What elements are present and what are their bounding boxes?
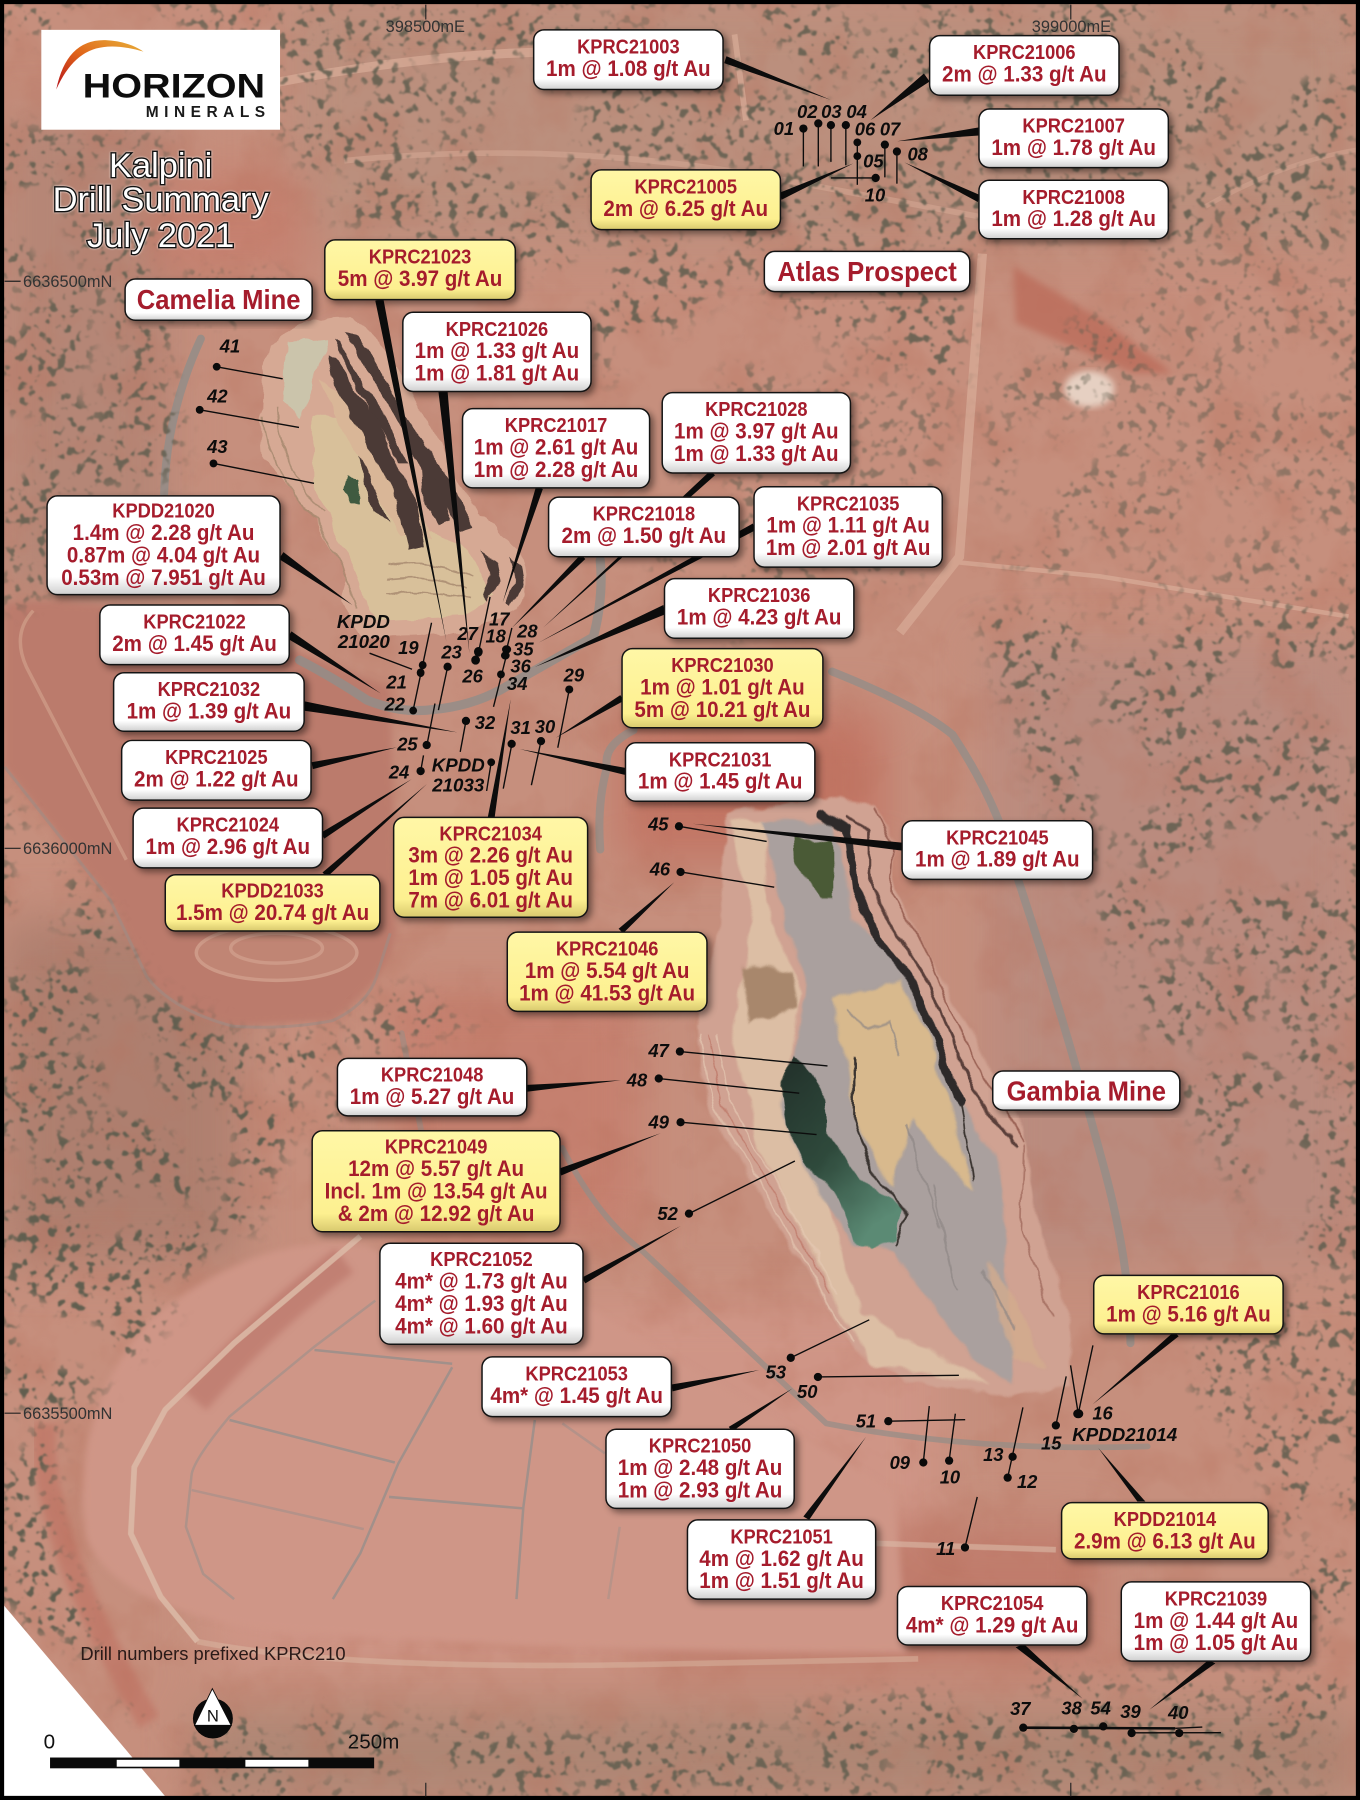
callout KPDD21033 highlighted [165, 875, 380, 931]
callout KPRC21045: 1m @ 1.89 g/t Au [915, 847, 1080, 872]
callout KPRC21028: KPRC21028 [705, 399, 808, 421]
callout KPRC21008 [979, 180, 1168, 239]
white corner [3, 1605, 166, 1798]
drill hole 10 south: 10 [940, 1466, 961, 1487]
drill hole 24: 24 [388, 761, 409, 782]
callout KPRC21006: KPRC21006 [973, 42, 1076, 64]
drill hole 49: 49 [648, 1112, 670, 1133]
drill hole 54: 54 [1090, 1698, 1111, 1719]
callout KPRC21046 highlighted: 1m @ 41.53 g/t Au [519, 981, 695, 1006]
drill hole 04 [842, 101, 867, 165]
callout KPRC21035: KPRC21035 [797, 494, 900, 515]
callout KPRC21034 highlighted: KPRC21034 [439, 824, 542, 846]
drill hole 18: 18 [485, 626, 507, 647]
drill hole 05: 05 [863, 151, 884, 172]
callout KPRC21023 highlighted [325, 240, 515, 300]
callout KPRC21036 [665, 579, 854, 638]
leader KPRC21022 [287, 631, 381, 693]
leader KPRC21051 [803, 1437, 866, 1520]
drill hole 07 [880, 119, 901, 177]
callout KPRC21053: 4m* @ 1.45 g/t Au [490, 1383, 663, 1408]
callout KPRC21052: 4m* @ 1.93 g/t Au [395, 1291, 568, 1316]
drill hole 05 [853, 151, 884, 172]
callout KPRC21024 [133, 808, 322, 868]
drill hole 12 [1004, 1471, 1038, 1492]
drill hole 43 [206, 436, 314, 483]
drill hole 12: 12 [1017, 1471, 1038, 1492]
drill hole 34 [494, 657, 527, 707]
drill hole 04: 04 [846, 101, 867, 122]
drill hole 08 [893, 143, 929, 184]
drill hole 54 [1090, 1698, 1111, 1731]
leader KPRC21028 [543, 471, 715, 627]
note: drill numbers prefix: Drill numbers prefixed KPRC210 [80, 1643, 346, 1664]
callout KPRC21048 [337, 1058, 527, 1116]
leader KPRC21023 [375, 298, 446, 642]
callout KPRC21045: KPRC21045 [946, 828, 1049, 850]
drill hole 17: 17 [489, 609, 510, 630]
leader KPRC21008 [904, 162, 980, 202]
callout KPRC21016 highlighted [1094, 1275, 1283, 1334]
callout KPRC21005 highlighted: KPRC21005 [634, 177, 737, 199]
leader KPRC21050 [729, 1388, 793, 1432]
grid label 6636000mN: 6636000mN [23, 840, 112, 858]
callout KPRC21035 [754, 487, 942, 567]
leader KPRC21036 [535, 605, 666, 667]
drill hole 35: 35 [513, 639, 534, 660]
leader KPRC21026 [438, 391, 469, 653]
leader KPRC21049 [559, 1133, 661, 1176]
callout KPRC21006 [930, 36, 1119, 95]
callout KPRC21028: 1m @ 1.33 g/t Au [674, 441, 839, 466]
drill hole KPDD 21033: KPDD [432, 755, 485, 776]
drill hole 16 [1071, 1345, 1114, 1424]
callout KPRC21051: 4m @ 1.62 g/t Au [699, 1546, 864, 1571]
callout KPRC21016 highlighted: KPRC21016 [1137, 1282, 1240, 1304]
callout KPDD21020: KPDD21020 [112, 501, 215, 523]
drill hole 01: 01 [774, 118, 794, 139]
heading Camelia Mine: Camelia Mine [137, 284, 300, 315]
drill hole 40: 40 [1167, 1702, 1189, 1723]
drill hole 10 south [940, 1414, 961, 1487]
callout KPRC21051: KPRC21051 [730, 1527, 833, 1549]
leader KPRC21039 [1149, 1660, 1215, 1710]
callout KPDD21033 highlighted: 1.5m @ 20.74 g/t Au [176, 900, 369, 925]
drill hole 23: 23 [440, 641, 462, 662]
drill hole 49 [648, 1112, 817, 1135]
callout KPRC21018: KPRC21018 [593, 504, 695, 526]
callout KPRC21039: 1m @ 1.44 g/t Au [1134, 1608, 1298, 1633]
callout KPRC21022: 2m @ 1.45 g/t Au [112, 631, 277, 656]
callout KPRC21026: 1m @ 1.81 g/t Au [415, 361, 579, 386]
drill hole 38 [1061, 1698, 1083, 1733]
callout KPDD21020: 1.4m @ 2.28 g/t Au [73, 520, 254, 545]
callout KPRC21054: KPRC21054 [941, 1593, 1044, 1615]
callout KPRC21045 [902, 821, 1093, 879]
leader KPRC21054 [1016, 1644, 1083, 1699]
callout KPRC21017: 1m @ 2.61 g/t Au [474, 435, 638, 460]
drill hole 26: 26 [461, 666, 484, 687]
callout KPRC21031: 1m @ 1.45 g/t Au [638, 769, 802, 794]
drill hole label KPDD 21020: KPDD [337, 611, 390, 632]
icon: north arrow: N [207, 1706, 219, 1725]
drill hole 37 [1010, 1698, 1031, 1732]
callout KPRC21007: 1m @ 1.78 g/t Au [991, 135, 1156, 160]
drill hole 45: 45 [647, 813, 669, 834]
callout KPRC21034 highlighted [394, 817, 588, 917]
callout KPRC21028: 1m @ 3.97 g/t Au [674, 419, 839, 444]
callout KPRC21005 highlighted [591, 170, 780, 230]
drill hole 15 [1041, 1376, 1066, 1453]
drill hole 21: 21 [385, 671, 407, 692]
callout KPRC21024: KPRC21024 [177, 815, 279, 837]
callout KPRC21034 highlighted: 1m @ 1.05 g/t Au [408, 865, 573, 890]
drill hole 18 [485, 626, 512, 649]
heading Gambia Mine: Gambia Mine [1007, 1075, 1166, 1107]
drill hole 06 [853, 119, 876, 185]
callout KPRC21054 [897, 1586, 1087, 1645]
callout KPRC21039: KPRC21039 [1165, 1589, 1267, 1611]
drill hole 50: 50 [797, 1381, 818, 1402]
title: Kalpini [109, 147, 212, 185]
drill hole 25 [396, 703, 435, 755]
drill hole 27: 27 [456, 623, 479, 644]
callout KPRC21003: 1m @ 1.08 g/t Au [546, 56, 711, 81]
callout KPRC21046 highlighted [507, 932, 707, 1011]
Gambia pit [697, 796, 1070, 1397]
drill hole 09: 09 [890, 1452, 911, 1473]
callout KPDD21033 highlighted: KPDD21033 [221, 881, 324, 903]
callout KPRC21036: 1m @ 4.23 g/t Au [677, 605, 841, 630]
drill hole 11 [936, 1497, 977, 1559]
drill hole 35 [502, 639, 534, 660]
drill hole 30 [531, 716, 556, 785]
callout KPRC21017: KPRC21017 [505, 415, 607, 437]
drill hole 32: 32 [475, 712, 496, 733]
callout KPRC21024: 1m @ 2.96 g/t Au [146, 834, 310, 859]
drill hole 03: 03 [821, 101, 842, 122]
drill hole 23 [438, 641, 462, 710]
callout KPRC21018: 2m @ 1.50 g/t Au [562, 523, 726, 548]
leader KPRC21016 [1093, 1332, 1179, 1404]
scale bar: 250m [348, 1730, 399, 1753]
drill hole 42: 42 [206, 386, 228, 407]
drill hole 38: 38 [1061, 1698, 1083, 1719]
drill hole 31 [503, 717, 531, 789]
title [53, 147, 269, 255]
grid label 6636500mN: 6636500mN [23, 273, 112, 291]
callout KPRC21022: KPRC21022 [143, 612, 246, 634]
callout KPRC21008: 1m @ 1.28 g/t Au [991, 206, 1156, 231]
drill hole label KPDD 21020: 21020 [337, 631, 390, 652]
leader KPDD21014 [1098, 1448, 1145, 1502]
callout KPRC21049 highlighted [312, 1131, 560, 1232]
drill hole 51 [856, 1411, 965, 1432]
callout KPRC21049 highlighted: KPRC21049 [385, 1137, 487, 1159]
drill hole 39: 39 [1120, 1701, 1141, 1722]
callout KPRC21048: KPRC21048 [381, 1065, 484, 1087]
heading Atlas Prospect [764, 251, 970, 292]
callout KPRC21017: 1m @ 2.28 g/t Au [474, 457, 638, 482]
callout KPRC21049 highlighted: & 2m @ 12.92 g/t Au [338, 1201, 534, 1226]
drill hole KPDD 21033 [431, 755, 495, 796]
callout KPRC21051 [687, 1520, 876, 1599]
callout KPRC21028 [662, 393, 850, 473]
callout KPRC21031 [625, 743, 815, 801]
leader KPRC21035 [538, 523, 755, 643]
drill hole 53: 53 [766, 1361, 786, 1382]
drill hole 02: 02 [797, 101, 818, 122]
drill hole 36: 36 [510, 655, 532, 676]
leader KPRC21017 [503, 487, 543, 603]
drill hole 24 [388, 755, 425, 782]
callout KPDD21014 highlighted [1062, 1503, 1268, 1559]
callout KPRC21017 [463, 409, 650, 488]
leader KPRC21048 [527, 1080, 621, 1092]
callout KPRC21025 [122, 740, 311, 800]
callout KPRC21026 [403, 312, 591, 391]
title: Drill Summary [53, 181, 269, 219]
drill hole 46: 46 [649, 858, 671, 879]
leader KPRC21052 [582, 1226, 681, 1283]
callout KPRC21048: 1m @ 5.27 g/t Au [350, 1084, 514, 1109]
drill hole 08: 08 [907, 143, 929, 164]
scale bar [44, 1730, 399, 1768]
drill hole 22: 22 [384, 694, 406, 715]
drill hole 10 north: 10 [865, 185, 886, 206]
callout KPRC21026: 1m @ 1.33 g/t Au [415, 338, 579, 363]
drill hole 52 [657, 1161, 795, 1224]
drill hole 42 [196, 386, 299, 427]
drill hole 47: 47 [647, 1040, 670, 1061]
callout KPRC21049 highlighted: Incl. 1m @ 13.54 g/t Au [325, 1179, 548, 1204]
drill hole 37: 37 [1010, 1698, 1031, 1719]
drill hole 41: 41 [219, 336, 240, 357]
drill hole 36 [501, 651, 532, 676]
drill hole 43: 43 [206, 436, 228, 457]
callout KPRC21035: 1m @ 1.11 g/t Au [766, 513, 930, 538]
grid label 398500mE: 398500mE [386, 18, 465, 36]
drill hole 22 [384, 694, 417, 715]
callout KPRC21003: KPRC21003 [577, 37, 680, 59]
callout KPDD21020: 0.53m @ 7.951 g/t Au [61, 565, 266, 590]
callout KPRC21006: 2m @ 1.33 g/t Au [942, 62, 1107, 87]
leader KPRC21034 [488, 699, 511, 817]
heading Gambia Mine [993, 1071, 1180, 1110]
drill hole 39 [1120, 1701, 1141, 1737]
drill hole 30: 30 [535, 716, 556, 737]
icon: north arrow [193, 1689, 233, 1738]
drill hole 15: 15 [1041, 1432, 1062, 1453]
drill hole 16: 16 [1092, 1403, 1114, 1424]
callout KPRC21026: KPRC21026 [446, 319, 548, 341]
callout KPRC21046 highlighted: KPRC21046 [556, 939, 658, 961]
drill hole 34: 34 [507, 673, 527, 694]
leader KPRC21006 [871, 73, 930, 120]
callout KPDD21014 highlighted: KPDD21014 [1114, 1509, 1216, 1531]
drill hole 40 [1167, 1702, 1189, 1737]
callout KPRC21054: 4m* @ 1.29 g/t Au [906, 1613, 1078, 1638]
callout KPRC21023 highlighted: 5m @ 3.97 g/t Au [338, 266, 502, 291]
callout KPRC21030 highlighted [622, 649, 823, 728]
drill hole 03 [821, 101, 842, 162]
drill hole 19: 19 [398, 637, 419, 658]
drill hole 13 [983, 1407, 1023, 1478]
callout KPRC21008: KPRC21008 [1022, 187, 1125, 209]
drill hole 27 [456, 597, 490, 657]
drill hole 41 [213, 336, 283, 379]
callout KPRC21052: 4m* @ 1.73 g/t Au [395, 1269, 568, 1294]
drill hole 06: 06 [855, 119, 876, 140]
callout KPRC21039 [1121, 1582, 1311, 1661]
callout KPRC21039: 1m @ 1.05 g/t Au [1134, 1630, 1298, 1655]
callout KPRC21032: KPRC21032 [158, 679, 260, 701]
leader KPRC21032 [304, 701, 457, 732]
heading Atlas Prospect: Atlas Prospect [777, 256, 957, 287]
drill hole KPDD 21033: 21033 [431, 775, 485, 796]
leader KPRC21003 [724, 56, 831, 100]
drill hole 50 [797, 1373, 959, 1402]
drill hole 09 [890, 1406, 929, 1473]
drill hole 48: 48 [626, 1070, 648, 1091]
callout KPRC21005 highlighted: 2m @ 6.25 g/t Au [603, 196, 768, 221]
drill hole 02 [797, 101, 822, 166]
leader KPRC21024 [321, 779, 412, 839]
scale bar: 0 [44, 1730, 55, 1753]
callout KPRC21023 highlighted: KPRC21023 [369, 247, 471, 269]
drill hole 01 [774, 118, 808, 166]
drill hole 11: 11 [936, 1538, 955, 1559]
drill hole 48 [626, 1070, 799, 1093]
drill hole label KPDD21014: KPDD21014 [1072, 1424, 1178, 1445]
callout KPDD21020: 0.87m @ 4.04 g/t Au [67, 543, 260, 568]
callout KPRC21031: KPRC21031 [669, 750, 772, 771]
callout KPRC21046 highlighted: 1m @ 5.54 g/t Au [525, 958, 689, 983]
leader KPRC21046 [619, 882, 674, 933]
callout KPRC21032 [114, 673, 304, 731]
logo: Horizon Minerals: MINERALS [146, 104, 265, 121]
callout KPRC21022 [100, 605, 289, 665]
callout KPRC21032: 1m @ 1.39 g/t Au [127, 699, 291, 724]
leader KPRC21018 [512, 554, 585, 628]
grid label 6635500mN: 6635500mN [23, 1405, 112, 1423]
callout KPRC21003 [534, 30, 723, 90]
callout KPRC21050: KPRC21050 [649, 1436, 751, 1458]
drill hole 19 [398, 623, 432, 710]
callout KPRC21051: 1m @ 1.51 g/t Au [699, 1568, 864, 1593]
callout KPRC21030 highlighted: 5m @ 10.21 g/t Au [634, 697, 810, 722]
callout KPRC21052: KPRC21052 [430, 1249, 533, 1271]
drill hole 28: 28 [516, 621, 538, 642]
leader KPRC21005 [779, 163, 853, 200]
callout KPRC21053: KPRC21053 [525, 1364, 628, 1386]
Camelia pit [261, 316, 525, 637]
drill hole 13: 13 [983, 1444, 1004, 1465]
leader KPDD21033 [322, 784, 427, 877]
drill hole 29: 29 [563, 664, 585, 686]
callout KPRC21007: KPRC21007 [1022, 116, 1125, 138]
callout KPRC21049 highlighted: 12m @ 5.57 g/t Au [348, 1156, 524, 1181]
drill hole 47 [647, 1040, 827, 1066]
leader KPRC21031 [520, 749, 626, 775]
leader KPRC21025 [311, 747, 397, 769]
drill hole 53 [766, 1320, 869, 1382]
callout KPRC21034 highlighted: 3m @ 2.26 g/t Au [408, 843, 573, 868]
grid label 399000mE: 399000mE [1032, 18, 1111, 36]
drill traces row [1023, 1727, 1221, 1733]
leader KPDD21020 [279, 552, 352, 605]
leader KPRC21030 [556, 695, 624, 738]
callout KPRC21036: KPRC21036 [708, 585, 810, 607]
callout KPRC21018 [549, 497, 739, 557]
drill hole 45 [647, 813, 767, 841]
drill hole 29 [558, 664, 585, 748]
callout KPRC21034 highlighted: 7m @ 6.01 g/t Au [408, 888, 573, 913]
callout KPRC21050: 1m @ 2.48 g/t Au [618, 1455, 782, 1480]
drill hole 26 [461, 655, 484, 687]
callout KPDD21014 highlighted: 2.9m @ 6.13 g/t Au [1074, 1529, 1256, 1554]
drill hole 51: 51 [856, 1411, 876, 1432]
callout KPRC21050 [606, 1429, 794, 1508]
drill hole 46 [649, 858, 774, 887]
drill hole 31: 31 [510, 717, 531, 738]
drill hole 21 [385, 668, 425, 692]
callout KPRC21035: 1m @ 2.01 g/t Au [766, 535, 930, 560]
callout KPDD21020 [47, 496, 280, 595]
callout KPRC21030 highlighted: KPRC21030 [671, 655, 774, 677]
callout KPRC21050: 1m @ 2.93 g/t Au [618, 1478, 782, 1503]
callout KPRC21016 highlighted: 1m @ 5.16 g/t Au [1106, 1302, 1271, 1327]
drill hole label KPDD 21020 [337, 611, 412, 669]
callout KPRC21052 [380, 1243, 583, 1344]
logo: Horizon Minerals: HORIZON [83, 68, 265, 106]
drill hole 25: 25 [396, 734, 418, 755]
drill hole 52: 52 [657, 1203, 679, 1224]
callout KPRC21025: 2m @ 1.22 g/t Au [134, 767, 299, 792]
drill hole 07: 07 [880, 119, 901, 140]
logo: Horizon Minerals [41, 30, 280, 130]
leader KPRC21007 [897, 127, 979, 141]
callout KPRC21030 highlighted: 1m @ 1.01 g/t Au [640, 675, 805, 700]
leader KPRC21045 [693, 824, 902, 851]
drill hole 32 [460, 712, 496, 752]
title: July 2021 [87, 217, 234, 255]
callout KPRC21052: 4m* @ 1.60 g/t Au [395, 1314, 568, 1339]
heading Camelia Mine [125, 279, 312, 320]
leader KPRC21053 [671, 1370, 759, 1391]
callout KPRC21007 [979, 109, 1168, 168]
callout KPRC21025: KPRC21025 [165, 747, 268, 769]
callout KPRC21053 [482, 1357, 671, 1417]
drill hole 10 north [831, 174, 886, 206]
